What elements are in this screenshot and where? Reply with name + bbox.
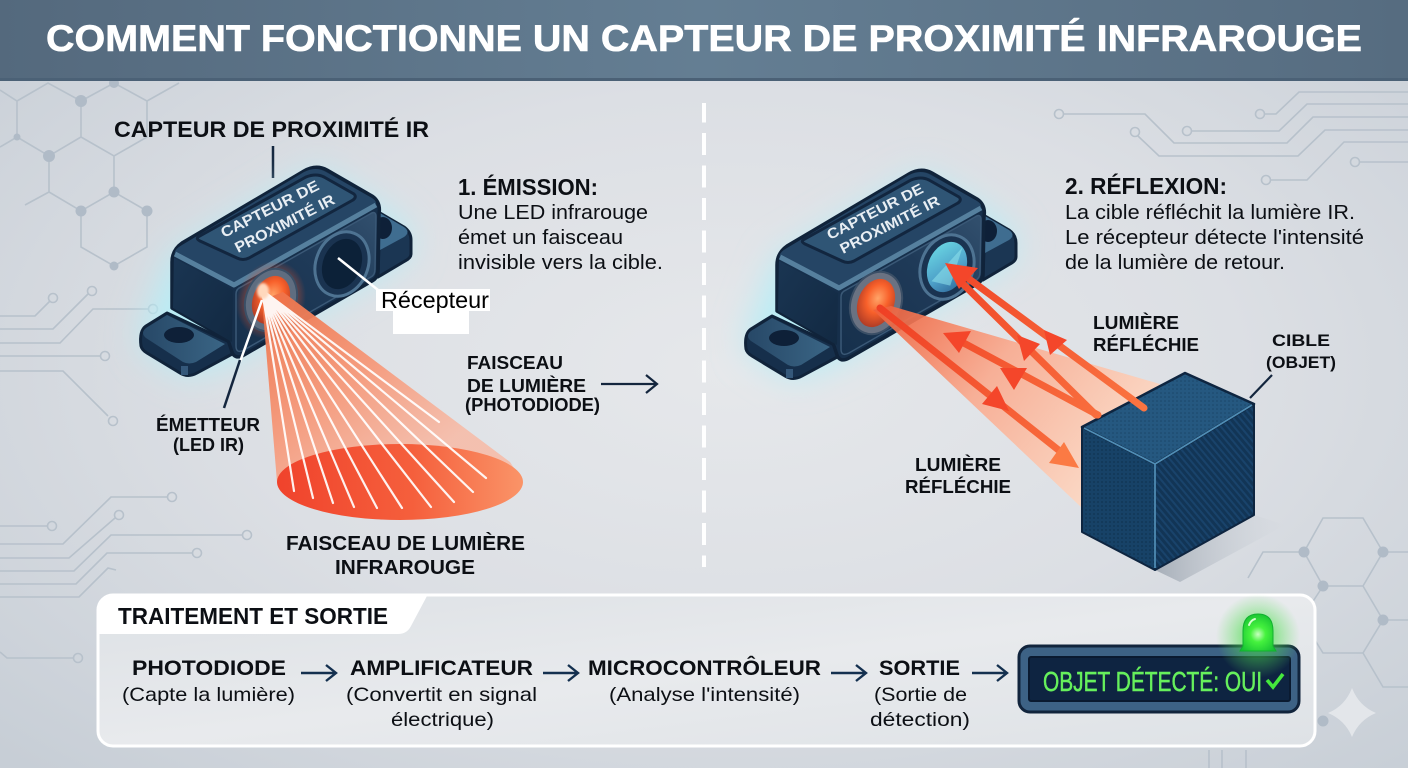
step: photodiode: PHOTODIODE bbox=[132, 656, 286, 680]
heading: sensor name: CAPTEUR DE PROXIMITÉ IR bbox=[114, 117, 429, 142]
step: microcontroller: (Analyse l'intensité) bbox=[609, 684, 800, 706]
label: receiver on white patches: Récepteur bbox=[381, 287, 489, 313]
text block: step 2 reflection: de la lumière de retour. bbox=[1065, 251, 1285, 274]
label: target: (OBJET) bbox=[1266, 353, 1336, 372]
step: amplifier: AMPLIFICATEUR bbox=[350, 656, 533, 680]
step: output: SORTIE bbox=[879, 656, 960, 680]
beam of infrared light bbox=[257, 283, 523, 520]
icon: receiver lens bbox=[306, 224, 378, 304]
text block: step 1 emission: Une LED infrarouge bbox=[458, 201, 648, 224]
cube shadow bbox=[1155, 515, 1285, 582]
leader line: sensor name bbox=[272, 146, 274, 178]
label: emitter bbox=[156, 414, 260, 455]
step: amplifier: (Convertit en signal bbox=[346, 684, 537, 706]
icon: emitter LED bbox=[224, 250, 318, 350]
panel tab heading: TRAITEMENT ET SORTIE bbox=[118, 603, 388, 629]
status display bbox=[1019, 646, 1299, 712]
sensor plate label: PROXIMITÉ IR bbox=[837, 192, 943, 258]
step: output: (Sortie de bbox=[874, 684, 967, 706]
step: photodiode bbox=[122, 656, 295, 706]
arrow bbox=[972, 665, 1007, 681]
leader line: target bbox=[1250, 375, 1272, 398]
step: amplifier bbox=[346, 656, 537, 731]
label: light beam photodiode bbox=[465, 352, 600, 415]
label: reflected light lower: LUMIÈRE bbox=[915, 454, 1001, 475]
step: output: détection) bbox=[870, 709, 970, 731]
sensor plate label: CAPTEUR DE bbox=[218, 177, 322, 242]
sensor plate label bbox=[825, 181, 943, 258]
step: output bbox=[870, 656, 970, 731]
status display: OBJET DÉTECTÉ: OUI bbox=[1043, 666, 1262, 697]
label: infrared light beam: FAISCEAU DE LUMIÈRE bbox=[286, 532, 525, 555]
receiver lens bbox=[911, 227, 983, 307]
text block: step 1 emission: invisible vers la cible. bbox=[458, 251, 663, 274]
step: photodiode: (Capte la lumière) bbox=[122, 684, 295, 706]
label: reflected light lower: RÉFLÉCHIE bbox=[905, 476, 1011, 497]
label: reflected light upper bbox=[1093, 312, 1199, 355]
text block: step 1 emission: émet un faisceau bbox=[458, 226, 623, 249]
label: target bbox=[1266, 331, 1336, 372]
text block: step 1 emission: 1. ÉMISSION: bbox=[458, 173, 598, 200]
panel tab heading bbox=[99, 596, 427, 634]
sparkle mark bbox=[1328, 688, 1376, 737]
sensor plate label bbox=[218, 177, 338, 257]
text block: step 1 emission bbox=[458, 173, 663, 274]
emitter lens bbox=[841, 264, 911, 342]
label: emitter: ÉMETTEUR bbox=[156, 414, 260, 435]
label: infrared light beam bbox=[286, 532, 525, 579]
text block: step 2 reflection: La cible réfléchit la lumière IR. bbox=[1065, 201, 1355, 224]
label: reflected light upper: RÉFLÉCHIE bbox=[1093, 334, 1199, 355]
panel: emission bbox=[114, 117, 663, 579]
reflected beam cone bbox=[873, 306, 1160, 508]
title banner: COMMENT FONCTIONNE UN CAPTEUR DE PROXIMITÉ INFRAROUGE bbox=[46, 18, 1362, 59]
text block: step 2 reflection bbox=[1065, 172, 1364, 274]
icon: green status lamp bbox=[1216, 594, 1300, 678]
sensor plate label: CAPTEUR DE bbox=[825, 181, 927, 244]
target cube bbox=[1082, 373, 1254, 570]
label: emitter: (LED IR) bbox=[173, 435, 244, 455]
leader line: receiver bbox=[338, 258, 378, 290]
sensor plate label: PROXIMITÉ IR bbox=[232, 191, 338, 257]
icon: check mark bbox=[1267, 674, 1283, 687]
step: microcontroller bbox=[588, 655, 821, 706]
label: infrared light beam: INFRAROUGE bbox=[335, 557, 475, 579]
illustration: sensor receiving reflection bbox=[746, 170, 1016, 379]
arrow: beam label bbox=[601, 375, 657, 393]
panel: reflection bbox=[746, 170, 1364, 582]
dashed divider bbox=[702, 103, 706, 567]
arrow bbox=[831, 665, 866, 681]
label: reflected light lower bbox=[905, 454, 1011, 497]
label: receiver on white patches bbox=[376, 287, 490, 334]
label: light beam photodiode: (PHOTODIODE) bbox=[465, 395, 600, 415]
illustration: IR sensor with emitter beam bbox=[141, 167, 523, 520]
arrow bbox=[543, 665, 578, 681]
panel: processing and output bbox=[98, 594, 1315, 746]
label: light beam photodiode: DE LUMIÈRE bbox=[467, 375, 586, 396]
text block: step 2 reflection: Le récepteur détecte l'intensité bbox=[1065, 226, 1364, 249]
label: light beam photodiode: FAISCEAU bbox=[467, 352, 563, 373]
leader line: emitter bbox=[224, 300, 262, 408]
step: amplifier: électrique) bbox=[391, 709, 494, 731]
title banner bbox=[0, 0, 1408, 81]
light arrows bbox=[880, 263, 1144, 468]
arrow bbox=[301, 665, 336, 681]
label: reflected light upper: LUMIÈRE bbox=[1093, 312, 1179, 333]
label: target: CIBLE bbox=[1272, 331, 1330, 350]
step: microcontroller: MICROCONTRÔLEUR bbox=[588, 655, 821, 680]
text block: step 2 reflection: 2. RÉFLEXION: bbox=[1065, 172, 1227, 199]
